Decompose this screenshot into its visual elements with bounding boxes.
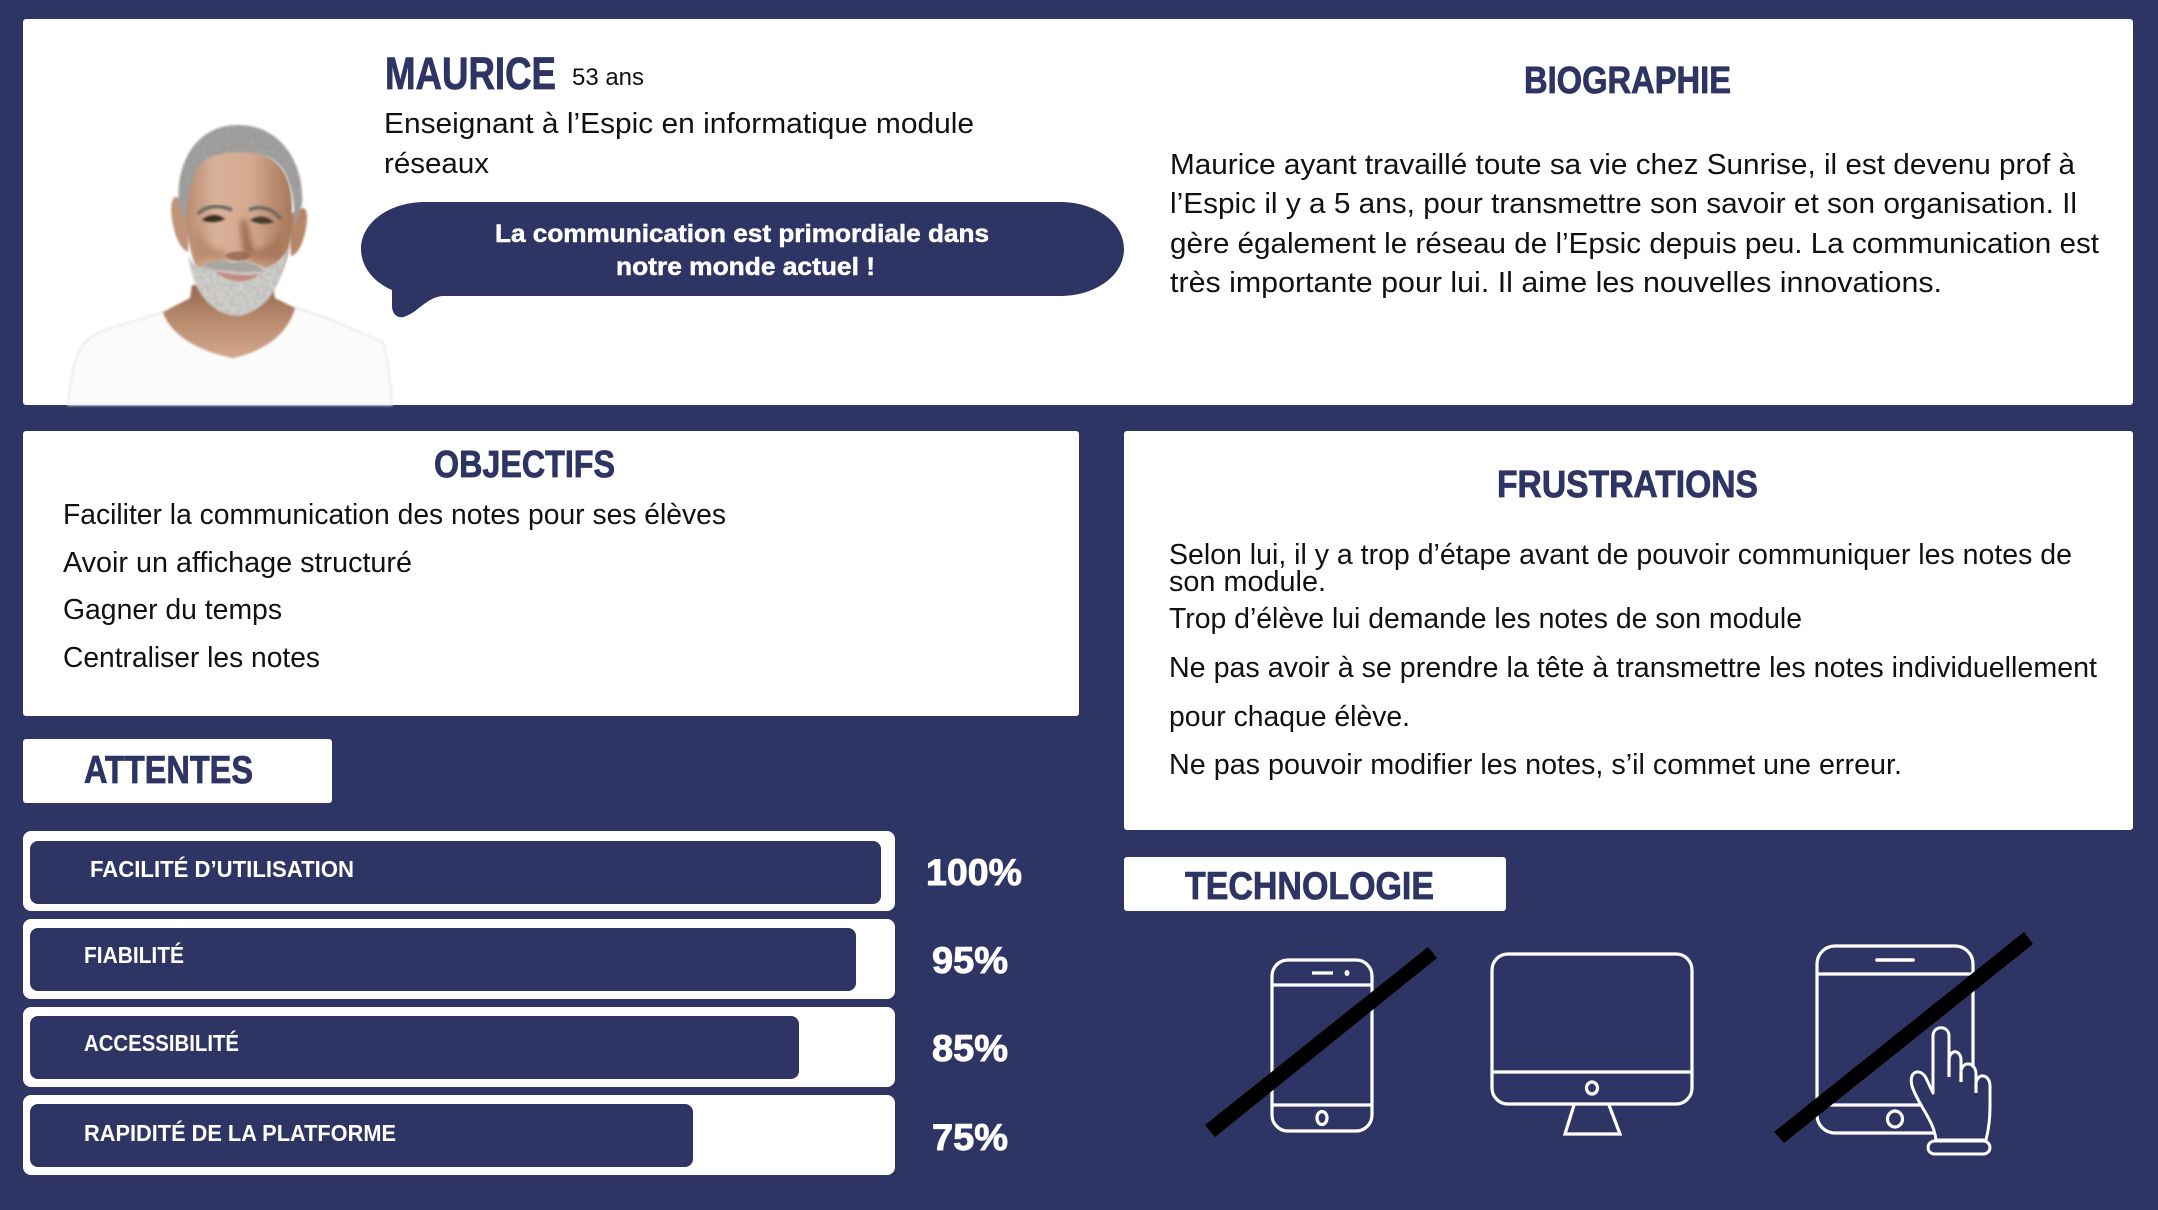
technologie heading: TECHNOLOGIE [1185, 865, 1434, 908]
bar chart: attentes [23, 831, 1022, 1175]
role: réseaux [384, 148, 490, 180]
panel: profile header [23, 19, 2133, 405]
frustrations list [1169, 539, 2097, 781]
objectifs list: Avoir un affichage structuré [63, 547, 412, 579]
icon: desktop monitor [1492, 954, 1692, 1134]
cheek and nose shading [194, 218, 283, 262]
biography heading: BIOGRAPHIE [1524, 60, 1731, 102]
objectifs heading: OBJECTIFS [434, 444, 615, 486]
technologie heading [1124, 857, 1506, 911]
portrait of Maurice [68, 125, 392, 405]
frustrations list: Selon lui, il y a trop d’étape avant de pouvoir communiquer les notes de [1169, 539, 2072, 571]
neck [163, 285, 295, 358]
frustrations list: Ne pas pouvoir modifier les notes, s’il commet une erreur. [1169, 749, 1902, 781]
frustrations list: pour chaque élève. [1169, 701, 1410, 733]
eyes and brows [198, 207, 281, 224]
speech bubble quote: La communication est primordiale dans [495, 220, 989, 248]
biography text [1170, 149, 2099, 299]
mouth [215, 271, 259, 281]
biography text: l’Espic il y a 5 ans, pour transmettre son savoir et son organisation. Il [1170, 188, 2077, 220]
bar: fiabilité 95% [23, 919, 1008, 999]
bar: accessibilité 85%: 85% [932, 1028, 1008, 1069]
nose [225, 252, 251, 260]
objectifs list: Centraliser les notes [63, 642, 320, 674]
age: 53 ans [572, 64, 644, 91]
objectifs list: Faciliter la communication des notes pour ses élèves [63, 499, 726, 531]
name: MAURICE [385, 48, 556, 99]
hair [178, 125, 302, 224]
biography text: très importante pour lui. Il aime les nouvelles innovations. [1170, 267, 1942, 299]
frustrations list: Ne pas avoir à se prendre la tête à transmettre les notes individuellement [1169, 652, 2097, 684]
bar: rapidité de la platforme 75% [23, 1095, 1008, 1175]
attentes heading: ATTENTES [84, 749, 253, 792]
bar: rapidité de la platforme 75%: 75% [932, 1117, 1008, 1158]
frustrations list: son module. [1169, 566, 1326, 598]
beard [188, 246, 289, 316]
icon: tablet with hand crossed out [1774, 932, 2033, 1154]
icon: pointing hand [1911, 1028, 1990, 1154]
frustrations list: Trop d’élève lui demande les notes de son module [1169, 603, 1802, 635]
attentes heading [23, 739, 332, 803]
bar: facilité d'utilisation 100%: 100% [926, 852, 1022, 893]
ears [171, 197, 307, 256]
frustrations heading: FRUSTRATIONS [1497, 464, 1758, 506]
panel: objectifs [23, 431, 1079, 716]
panel: frustrations [1124, 431, 2133, 830]
speech bubble quote [361, 202, 1124, 317]
role: Enseignant à l’Espic en informatique module [384, 108, 974, 140]
objectifs list: Gagner du temps [63, 594, 282, 626]
face [185, 150, 292, 315]
bar: accessibilité 85%: ACCESSIBILITÉ [84, 1029, 239, 1056]
bar: rapidité de la platforme 75%: RAPIDITÉ DE LA PLATFORME [84, 1119, 396, 1146]
role [384, 108, 974, 180]
speech bubble quote: notre monde actuel ! [616, 253, 875, 281]
shirt [68, 307, 392, 405]
bar: facilité d'utilisation 100%: FACILITÉ D’UTILISATION [90, 855, 354, 882]
icon: smartphone crossed out [1205, 947, 1437, 1137]
biography text: gère également le réseau de l’Epsic depuis peu. La communication est [1170, 228, 2099, 260]
bar: fiabilité 95%: FIABILITÉ [84, 941, 184, 968]
moustache [203, 260, 265, 272]
objectifs list [63, 499, 726, 674]
bar: accessibilité 85% [23, 1007, 1008, 1087]
bar: facilité d'utilisation 100% [23, 831, 1022, 911]
bar: fiabilité 95%: 95% [932, 940, 1008, 981]
biography text: Maurice ayant travaillé toute sa vie chez Sunrise, il est devenu prof à [1170, 149, 2076, 181]
